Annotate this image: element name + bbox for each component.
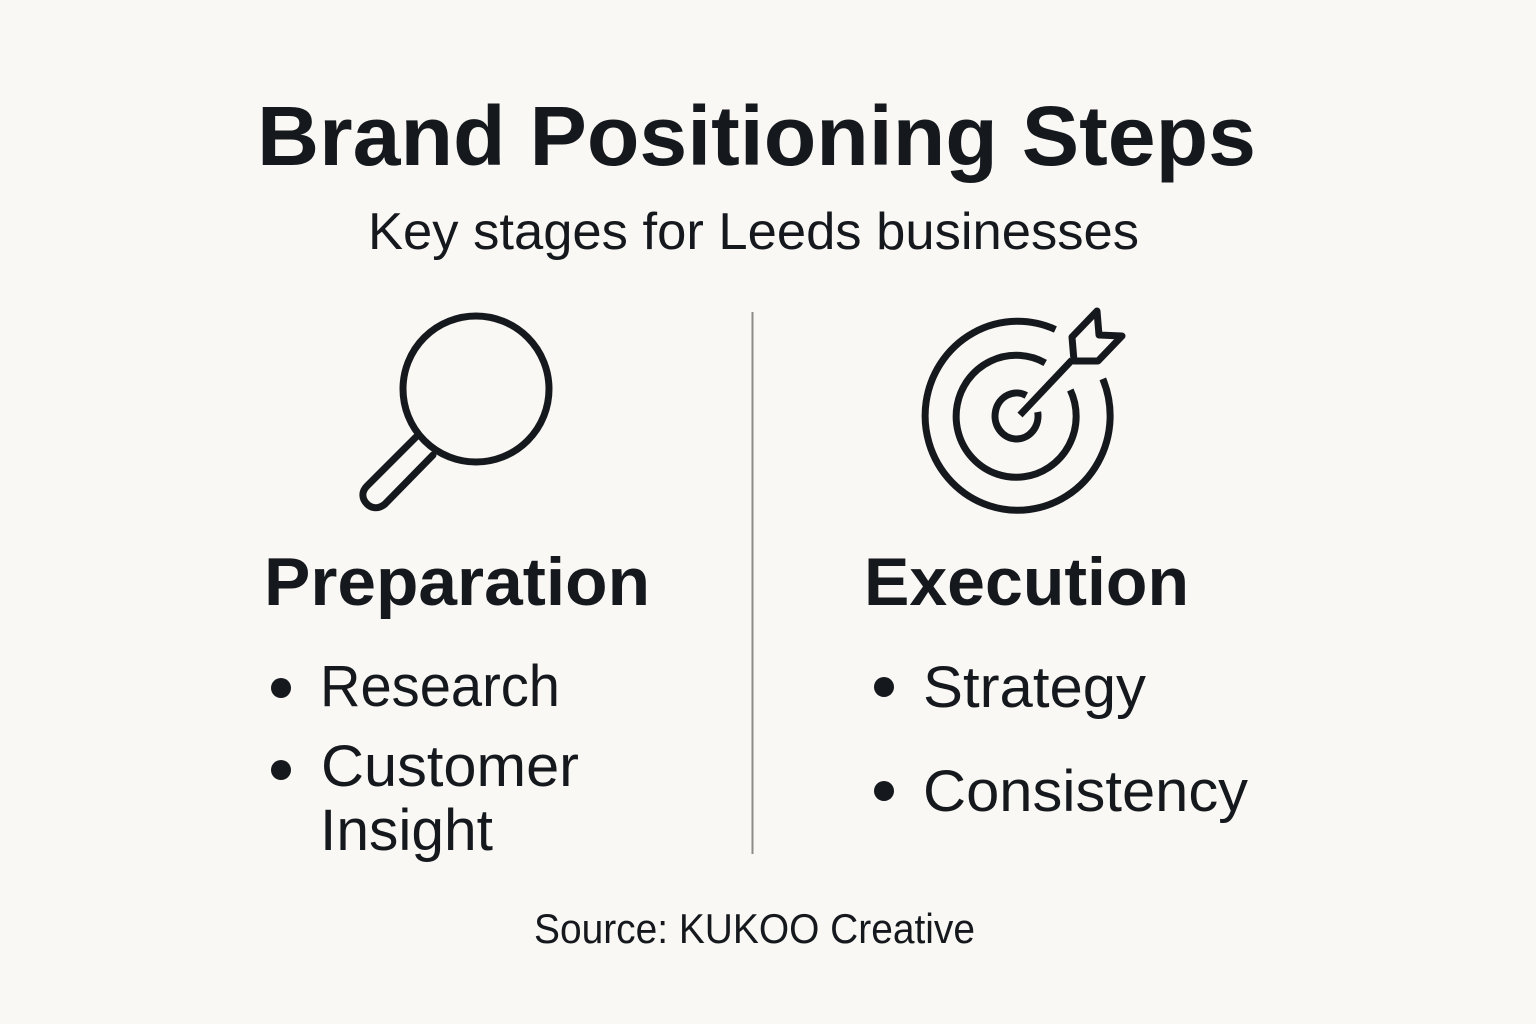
title: Brand Positioning Steps [257,89,1256,183]
source note: Source: KUKOO Creative [534,905,975,952]
item: customer insight [320,734,579,863]
item: strategy: Strategy [923,655,1146,720]
bullet: customer insight [271,760,291,780]
heading: execution: Execution [864,544,1189,620]
icon: target with arrow [925,311,1122,510]
icon: magnifying glass [363,316,549,508]
item: research: Research [320,654,560,719]
list: preparation items [271,654,579,863]
list: execution items [874,655,1248,824]
item: customer insight: Customer [321,734,579,799]
bullet: strategy [874,677,894,697]
heading: preparation: Preparation [264,544,650,620]
panel: preparation [264,316,650,863]
item: customer insight: Insight [320,798,493,863]
bullet: consistency [874,781,894,801]
panel: execution [864,311,1248,824]
item: consistency: Consistency [923,759,1248,824]
bullet: research [271,678,291,698]
subtitle: Key stages for Leeds businesses [368,203,1139,261]
